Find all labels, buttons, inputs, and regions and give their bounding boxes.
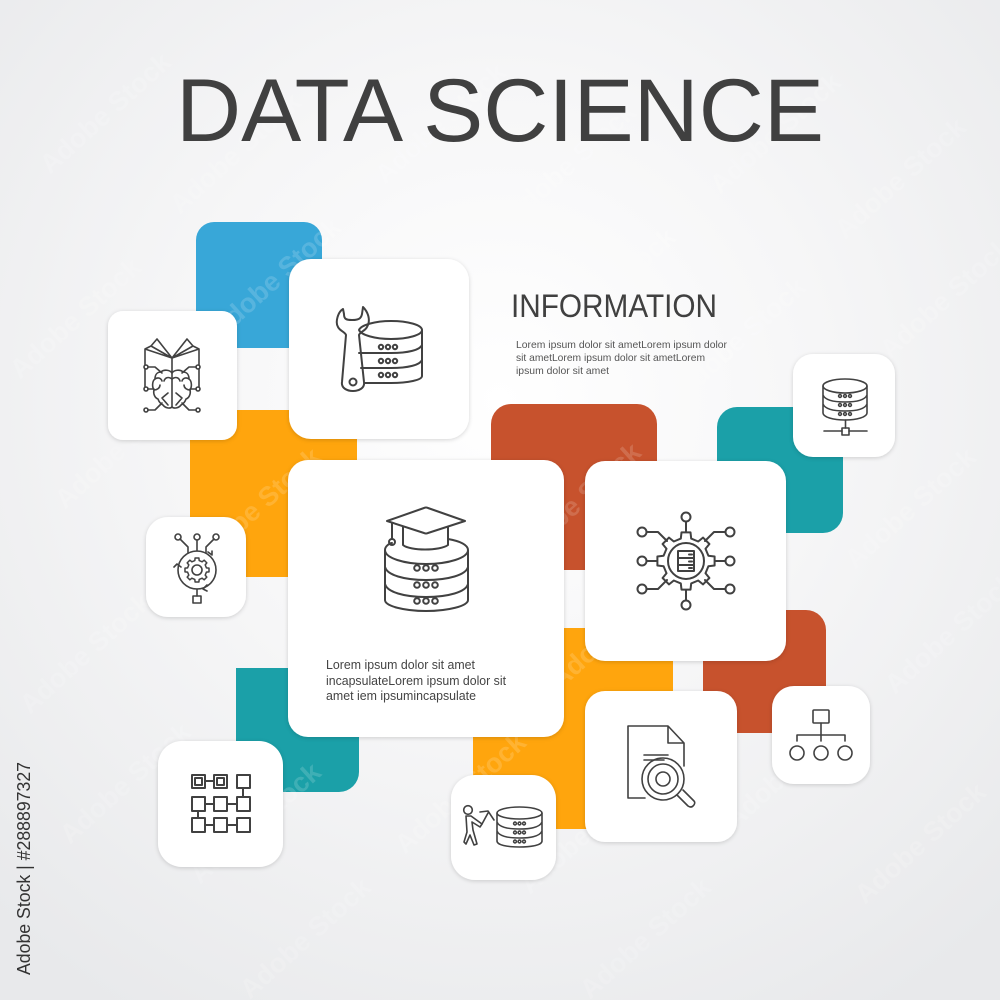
heading: information: INFORMATION (511, 288, 717, 324)
icon: document search (628, 726, 695, 807)
icon: miner and database (464, 806, 542, 847)
panel: document search (585, 691, 737, 842)
block: blue (196, 222, 322, 348)
panel: gear network (585, 461, 786, 661)
watermark pattern: Adobe Stock (544, 561, 687, 694)
text block: information body: ipsum dolor sit amet (516, 365, 609, 377)
panel: network database (793, 354, 895, 457)
watermark pattern: Adobe Stock (669, 271, 812, 404)
watermark pattern: Adobe Stock (184, 441, 327, 574)
watermark pattern: Adobe Stock (54, 716, 197, 849)
watermark pattern: Adobe Stock (389, 726, 532, 859)
watermark pattern: Adobe Stock (14, 586, 157, 719)
watermark pattern: Adobe Stock (34, 46, 177, 179)
watermark pattern: Adobe Stock (829, 111, 972, 244)
stock id label: Adobe Stock | #288897327 (14, 762, 34, 975)
block: orange left (190, 410, 357, 577)
panel: book and brain (108, 311, 237, 440)
watermark pattern: Adobe Stock (704, 66, 847, 199)
watermark pattern: Adobe Stock (344, 611, 487, 744)
text block: main body: amet iem ipsumincapsulate (326, 689, 476, 703)
icon: hierarchy (790, 710, 852, 760)
icon: network database (823, 379, 867, 435)
block: teal left (236, 668, 359, 792)
text block: main body: Lorem ipsum dolor sit amet (326, 658, 476, 672)
watermark pattern: Adobe Stock (719, 701, 862, 834)
watermark pattern: Adobe Stock (184, 756, 327, 889)
panel: flow grid (158, 741, 283, 867)
watermark pattern: Adobe Stock (839, 441, 982, 574)
watermark pattern: Adobe Stock (49, 381, 192, 514)
icon: flow grid (192, 775, 250, 832)
icon: graduation cap on database (385, 508, 468, 611)
block: red top (491, 404, 657, 570)
icon: gear network (638, 512, 734, 610)
panel: data mining (451, 775, 556, 880)
text block: main body: incapsulateLorem ipsum dolor sit (326, 674, 507, 688)
panel: hierarchy (772, 686, 870, 784)
panel: gear loop (146, 517, 246, 617)
watermark pattern: Adobe Stock (514, 766, 657, 899)
watermark pattern: Adobe Stock (4, 251, 147, 384)
block: red small (703, 610, 826, 733)
watermark pattern: Adobe Stock (164, 86, 307, 219)
panel: wrench database (289, 259, 469, 439)
watermark pattern: Adobe Stock (539, 221, 682, 354)
icon: gear loop (174, 534, 219, 603)
watermark pattern: Adobe Stock (204, 211, 347, 344)
watermark pattern: Adobe Stock (369, 56, 512, 189)
panel: main card (288, 460, 564, 737)
icon: wrench and database (337, 307, 422, 391)
text block: information body (516, 339, 727, 377)
watermark pattern: Adobe Stock (499, 96, 642, 229)
watermark pattern: Adobe Stock (504, 436, 647, 569)
text block: main body (326, 658, 507, 703)
text block: information body: sit ametLorem ipsum dolor sit ametLorem (516, 352, 705, 364)
block: teal right (717, 407, 843, 533)
icon: book and brain (144, 339, 200, 412)
watermark pattern: Adobe Stock (849, 776, 992, 909)
text block: information body: Lorem ipsum dolor sit ametLorem ipsum dolor (516, 339, 727, 351)
block: orange bottom (473, 628, 673, 829)
title: DATA SCIENCE (176, 60, 824, 160)
